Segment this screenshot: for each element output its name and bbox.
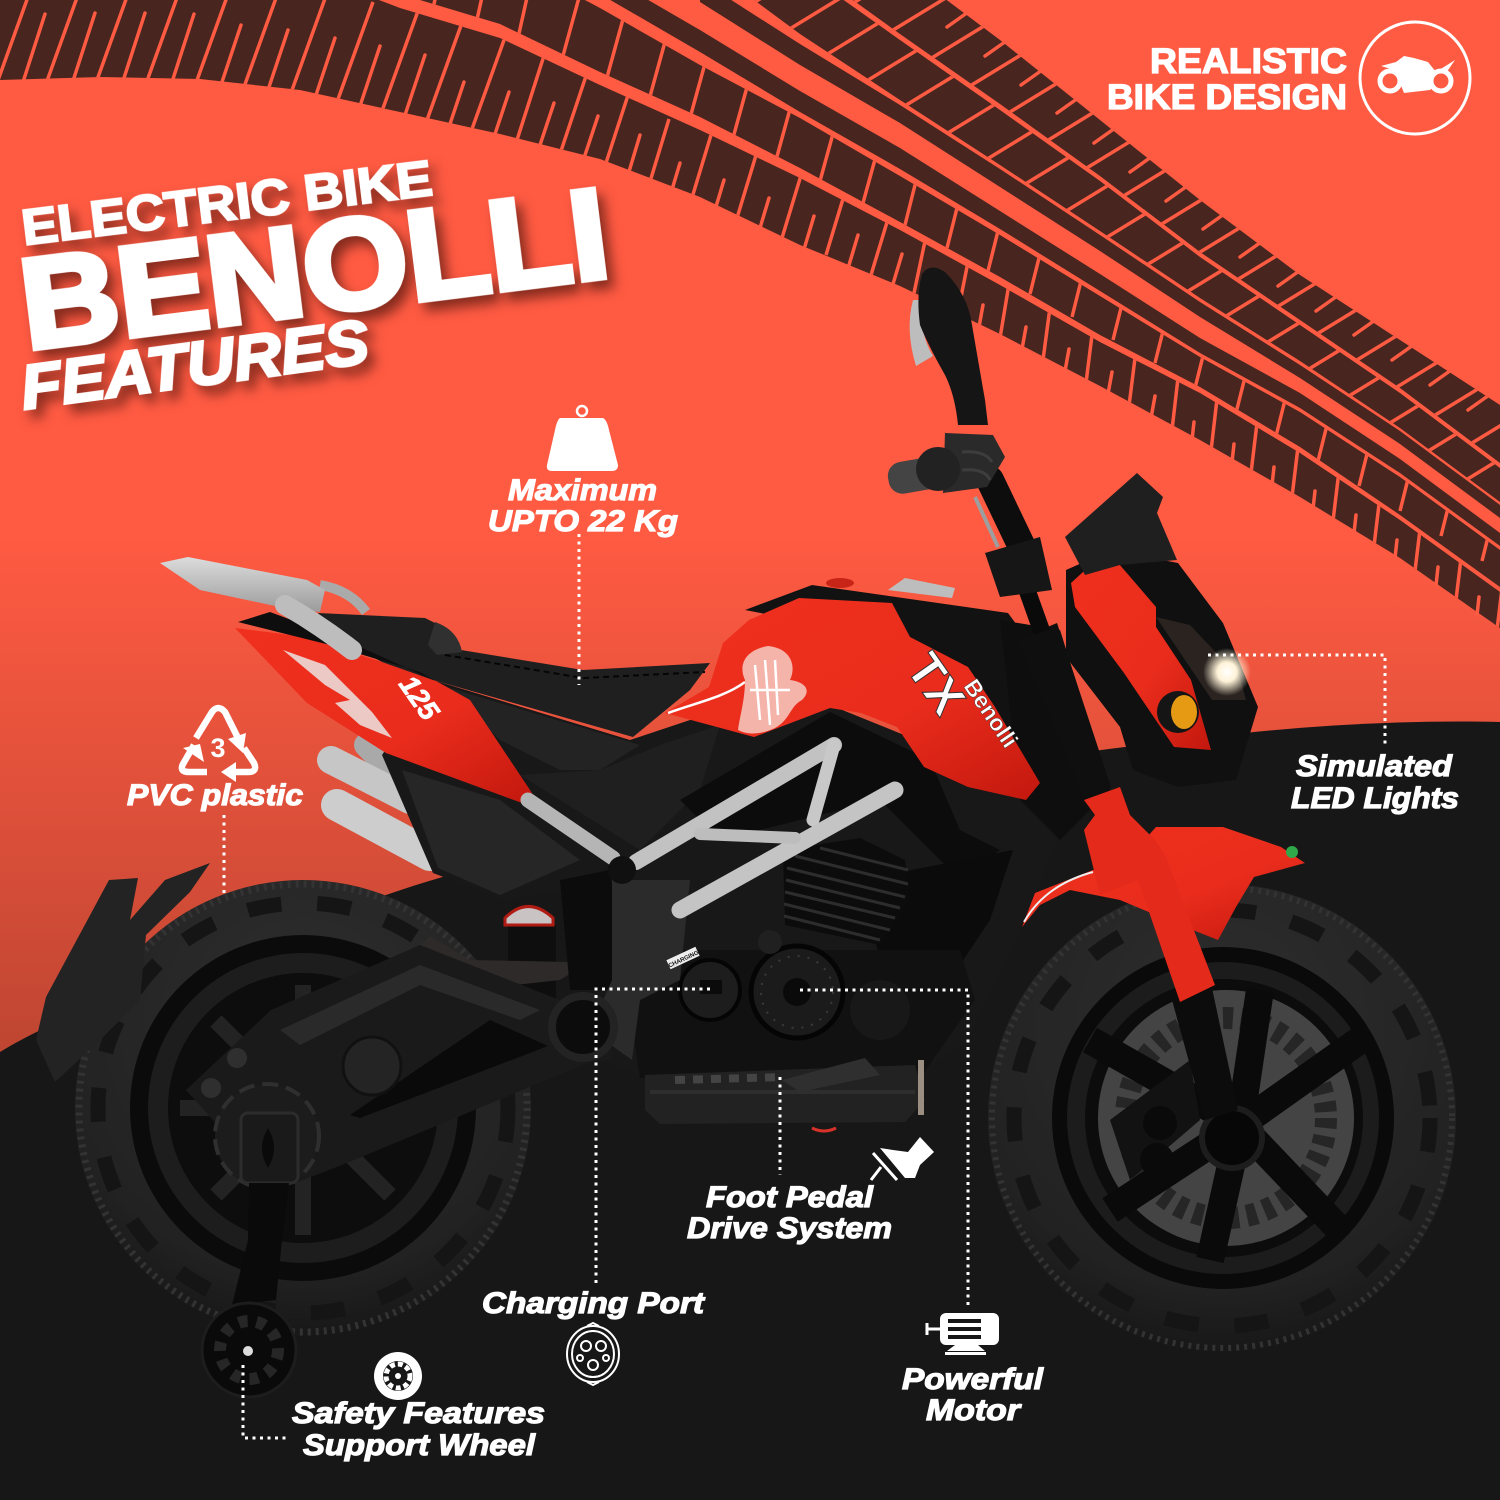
label: maximum upto 22 kg: Maximum <box>508 474 657 507</box>
handle grip <box>886 433 1005 496</box>
rear hub <box>215 1084 319 1188</box>
feature: safety support wheel <box>292 1352 545 1462</box>
label: PVC plastic: PVC plastic <box>127 779 303 812</box>
headlight glow <box>1203 648 1251 696</box>
foot board <box>645 1058 925 1131</box>
title line: benolli: BENOLLI <box>13 162 616 377</box>
tank controls <box>826 578 955 598</box>
engine discs <box>680 930 910 1040</box>
track band: inner solid strip two <box>700 0 1500 518</box>
icon: recycling triangle with 3 <box>182 708 255 782</box>
tank logo: Benolli <box>959 674 1023 752</box>
training wheel arm <box>232 1183 289 1305</box>
callout text <box>1107 42 1347 117</box>
rear fairing red <box>235 628 532 803</box>
front fork lower black <box>1172 988 1238 1120</box>
rear fairing number: 125 <box>393 670 446 726</box>
tyre tracks <box>0 0 1500 660</box>
track band: outer comb slits <box>23 13 1479 615</box>
training wheel <box>202 1303 296 1397</box>
icon: charging socket <box>567 1323 619 1385</box>
feature: powerful motor <box>902 1313 1044 1427</box>
title <box>13 150 616 423</box>
charging label: CHARGING <box>668 950 700 969</box>
head cowl red <box>1071 550 1211 750</box>
feature: simulated LED lights: Simulated <box>1296 750 1453 783</box>
motorcycle <box>36 267 1456 1397</box>
tank logo <box>896 644 1023 752</box>
engine fins <box>783 838 910 945</box>
feature: simulated LED lights <box>1291 750 1459 815</box>
feature: maximum load <box>488 406 678 538</box>
body panels <box>402 685 1013 1040</box>
feature: charging port <box>482 1287 706 1385</box>
feature: PVC plastic <box>127 708 303 812</box>
icon: electric motor <box>926 1313 999 1355</box>
front fork red <box>1084 787 1215 1002</box>
rear rack <box>160 557 366 650</box>
exhaust pipes <box>331 745 430 855</box>
tank logo: TX <box>896 644 975 725</box>
dashboard <box>1065 473 1177 575</box>
frame strut <box>590 880 690 1060</box>
exhaust cover and main body <box>382 680 1058 1078</box>
label: safety features support wheel <box>292 1397 545 1462</box>
background: dark lower wave <box>0 721 1500 1500</box>
bar clamp <box>985 537 1052 597</box>
label: foot pedal drive system: Foot Pedal <box>706 1181 874 1214</box>
dotted leader: support wheel <box>243 1365 290 1438</box>
icon: recycling triangle with 3: 3 <box>210 733 226 763</box>
dotted leader: PVC plastic <box>222 815 226 897</box>
swing arm <box>186 945 612 1185</box>
rear wheel <box>75 880 531 1336</box>
swing arm pivot <box>552 996 614 1058</box>
label: maximum upto 22 kg: UPTO 22 Kg <box>488 505 678 538</box>
feature: simulated LED lights: LED Lights <box>1291 782 1459 815</box>
engine lower housing <box>620 950 975 1078</box>
label: foot pedal drive system: Drive System <box>687 1212 892 1245</box>
head cowl black <box>1066 550 1258 787</box>
rear suspension <box>417 870 625 1005</box>
handlebar tube <box>990 480 1033 570</box>
callout text: REALISTIC <box>1150 42 1347 81</box>
track band: upper U slits <box>947 10 1492 410</box>
track band: inner solid strip one <box>600 0 1500 546</box>
seat <box>238 612 710 737</box>
track band: upper block tread <box>690 0 1500 510</box>
mirror <box>910 267 988 425</box>
label: safety features support wheel: Support Wheel <box>303 1429 536 1462</box>
speaker <box>343 1037 401 1095</box>
frame joint <box>608 856 636 884</box>
swing arm upper ridge and bolts <box>201 965 540 1098</box>
icon: weight <box>547 406 618 471</box>
icon: wheel <box>374 1352 422 1400</box>
feature: foot pedal drive system <box>687 1137 934 1245</box>
label: powerful motor: Powerful <box>902 1363 1044 1396</box>
dotted leader: LED lights <box>1208 655 1385 745</box>
label: maximum upto 22 kg <box>488 474 678 538</box>
label: powerful motor: Motor <box>926 1394 1023 1427</box>
front wheel <box>988 884 1456 1352</box>
label: foot pedal drive system <box>687 1181 892 1245</box>
track band: outer block tread <box>380 0 1500 600</box>
front fender <box>1022 827 1305 940</box>
icon: motorbike in circle <box>1360 22 1470 134</box>
dotted leader: maximum load <box>578 534 580 685</box>
filler behind fork <box>1000 620 1110 840</box>
label: powerful motor <box>902 1363 1044 1427</box>
steering stem <box>1027 590 1042 632</box>
swing arm inset panel <box>350 1020 548 1118</box>
title line: features: FEATURES <box>17 308 373 423</box>
dotted leader: charging port <box>596 989 710 1285</box>
fuel tank red <box>665 598 1040 800</box>
callout: realistic bike design <box>1107 22 1470 134</box>
label: charging port: Charging Port <box>482 1287 706 1320</box>
lion decal <box>668 646 807 734</box>
track band: upper U tread <box>852 0 1500 463</box>
callout text: BIKE DESIGN <box>1107 78 1347 117</box>
track band: outer comb tread <box>0 0 1500 660</box>
dotted leader: foot pedal <box>778 1077 782 1175</box>
headlight glass <box>1156 617 1246 700</box>
fender lamp <box>1286 846 1298 858</box>
title line: electric bike: ELECTRIC BIKE <box>19 150 435 256</box>
icon: boot on pedal <box>871 1137 934 1180</box>
label: safety features support wheel: Safety Features <box>292 1397 545 1430</box>
silver rod <box>975 497 998 547</box>
trellis frame tubes <box>528 745 895 910</box>
fuel tank black upper <box>745 585 1030 800</box>
front fork tube <box>1017 623 1111 797</box>
turn indicator <box>1157 691 1199 733</box>
dotted leader: motor <box>800 990 968 1305</box>
rear mudguard and plate <box>36 863 210 1082</box>
